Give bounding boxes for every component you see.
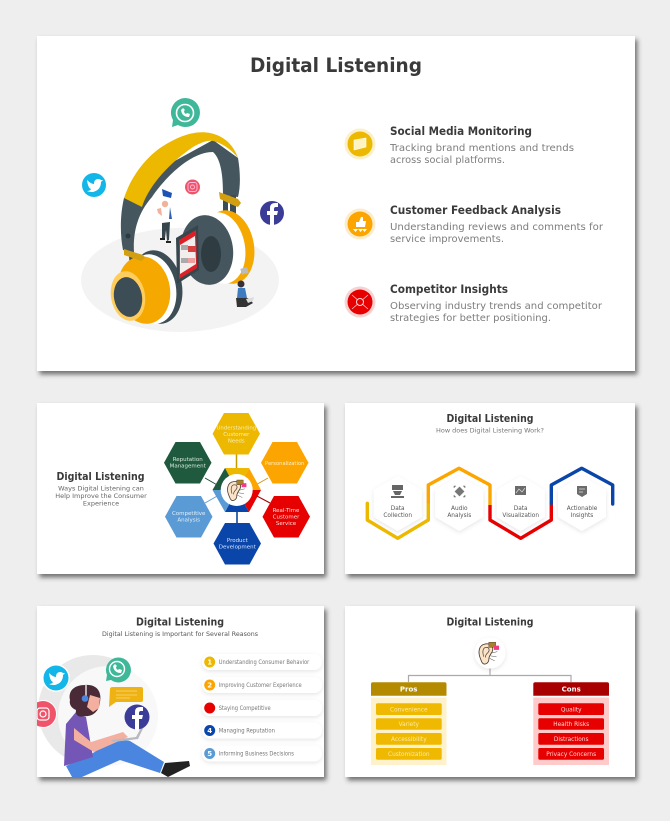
headband yellow <box>124 132 238 207</box>
item: distractions: Distractions <box>554 737 589 743</box>
feature: social media monitoring <box>344 124 574 166</box>
feature: competitor insights: Competitor Insights <box>390 282 508 296</box>
hexagon: competitive analysis: Competitive <box>172 511 206 517</box>
feature: customer feedback analysis: Understanding reviews and comments for <box>390 222 604 233</box>
reason 1: Understanding Consumer Behavior <box>219 660 310 666</box>
item: quality: Quality <box>561 707 582 713</box>
heading block: How does Digital Listening Work? <box>436 426 544 434</box>
step: audio analysis: Analysis <box>447 513 471 519</box>
feature: customer feedback analysis <box>344 203 604 245</box>
connector lines <box>408 668 571 682</box>
heading block: Digital Listening <box>136 616 224 628</box>
hexagon: real-time customer service: Service <box>276 521 297 527</box>
feature: social media monitoring: Social Media Monitoring <box>390 124 532 138</box>
speech bubble <box>109 687 143 707</box>
reason 4: Managing Reputation <box>219 728 275 734</box>
woman shirt <box>64 712 93 766</box>
hexagon: product development <box>214 523 261 564</box>
center hexagon <box>212 468 261 512</box>
heading block: Experience <box>83 500 119 508</box>
reason 2: 2 <box>207 682 212 690</box>
hexagon diagram <box>164 413 310 564</box>
woman hair and face <box>70 685 100 717</box>
icon: audio analysis <box>454 486 465 497</box>
step: audio analysis <box>435 476 483 531</box>
step: data visualization: Visualization <box>502 513 539 519</box>
reason 3 <box>202 700 322 716</box>
step: actionable insights: Actionable <box>567 506 598 512</box>
icon: data visualization <box>515 486 526 495</box>
item: privacy concerns: Privacy Concerns <box>546 752 596 758</box>
icon: facebook <box>260 201 284 225</box>
hexagon: reputation management: Management <box>170 464 207 470</box>
reason 5: Informing Business Decisions <box>219 752 294 758</box>
item: convenience: Convenience <box>390 707 428 713</box>
right ear cup <box>198 206 260 288</box>
icon: twitter <box>42 664 70 692</box>
icon: instagram <box>185 180 200 194</box>
icon: facebook <box>124 704 150 730</box>
hexagon: personalization: Personalization <box>265 461 304 467</box>
step: data visualization <box>497 476 545 531</box>
panel: pros: Pros <box>400 686 417 694</box>
icon: target arrows <box>352 295 368 309</box>
feature: social media monitoring: Tracking brand mentions and trends <box>389 143 574 154</box>
hexagon: product development: Product <box>227 538 249 544</box>
slide: why digital listening matters <box>30 606 324 777</box>
icon: data collection <box>391 485 404 498</box>
hexagon: real-time customer service: Real-Time <box>273 508 300 514</box>
woman arm <box>74 728 128 752</box>
item: customization: Customization <box>388 752 430 758</box>
step: actionable insights <box>558 476 606 531</box>
panel: cons: Cons <box>562 686 581 694</box>
icon: twitter <box>82 173 106 197</box>
feature: competitor insights: Observing industry trends and competitor <box>390 301 603 312</box>
slide: how digital listening works <box>345 403 635 574</box>
hexagon: real-time customer service <box>262 496 310 538</box>
hexagon: understanding customer needs: Understanding <box>216 426 256 432</box>
reason 2: Improving Customer Experience <box>219 683 302 689</box>
step: audio analysis: Audio <box>451 506 468 512</box>
reason 3: 3 <box>207 704 212 712</box>
reason 5: 5 <box>207 750 212 758</box>
hexagon: understanding customer needs: Needs <box>228 438 245 444</box>
hexagon: competitive analysis: Analysis <box>177 518 200 524</box>
woman shoe <box>161 761 190 777</box>
hexagon: understanding customer needs <box>213 413 260 454</box>
illustration: headphones with social icons <box>81 98 284 332</box>
hexagon: real-time customer service: Customer <box>273 514 300 520</box>
left ear cup <box>127 250 136 268</box>
step: actionable insights: Insights <box>571 513 593 519</box>
reason 1 <box>202 654 322 670</box>
reason 2 <box>202 677 322 693</box>
heading block: Digital Listening <box>446 413 534 425</box>
slide: main overview <box>37 36 635 371</box>
hexagon: product development: Development <box>219 544 257 550</box>
woman legs <box>66 740 164 777</box>
feature: customer feedback analysis: Customer Feedback Analysis <box>390 203 561 217</box>
hexagon: competitive analysis <box>165 496 212 538</box>
icon: instagram <box>37 700 57 728</box>
icon: whatsapp <box>171 98 200 127</box>
slide: pros and cons <box>345 606 635 777</box>
phone <box>176 225 199 284</box>
slide: ways to improve consumer experience <box>37 403 324 574</box>
feature: social media monitoring: across social platforms. <box>390 155 505 166</box>
ear icon <box>474 638 506 668</box>
item: health risks: Health Risks <box>553 722 589 728</box>
panel: pros <box>371 682 446 765</box>
step: data collection: Collection <box>383 513 412 519</box>
heading block: Help Improve the Consumer <box>55 492 147 500</box>
heading: Digital Listening <box>446 616 534 628</box>
hexagon: personalization <box>261 442 308 484</box>
man figure <box>157 189 172 243</box>
reason 3: Staying Competitive <box>219 706 271 712</box>
headband dark <box>121 140 240 253</box>
feature: competitor insights: strategies for better positioning. <box>390 313 551 324</box>
item: variety: Variety <box>399 722 420 728</box>
heading block: Ways Digital Listening can <box>58 484 144 492</box>
icon: actionable insights <box>577 486 587 497</box>
process path <box>367 468 613 538</box>
item: accessibility: Accessibility <box>391 737 427 743</box>
icon: whatsapp <box>106 657 131 682</box>
reason 1: 1 <box>207 658 212 666</box>
laptop <box>111 728 144 742</box>
hexagon: reputation management <box>164 442 212 484</box>
icon: thumbs up <box>353 217 367 232</box>
feature: competitor insights <box>344 282 603 324</box>
woman figure <box>236 280 254 307</box>
icon: monitoring <box>354 138 366 150</box>
reason 4 <box>202 722 322 738</box>
step: data collection <box>374 476 422 531</box>
hexagon: understanding customer needs: Customer <box>223 432 250 438</box>
hexagon: reputation management: Reputation <box>173 457 203 463</box>
heading block <box>436 413 544 434</box>
step: data visualization: Data <box>514 506 528 512</box>
reason 5 <box>202 746 322 762</box>
heading block: Digital Listening <box>56 471 144 483</box>
heading block <box>55 471 147 508</box>
reason 4: 4 <box>207 727 212 735</box>
panel: cons <box>533 682 609 765</box>
main title: Digital Listening <box>250 54 422 77</box>
heading block <box>102 616 259 638</box>
illustration: woman with laptop <box>30 655 190 777</box>
step: data collection: Data <box>391 506 405 512</box>
reasons list <box>202 654 322 762</box>
feature: customer feedback analysis: service improvements. <box>390 234 504 245</box>
heading block: Digital Listening is Important for Several Reasons <box>102 630 259 638</box>
